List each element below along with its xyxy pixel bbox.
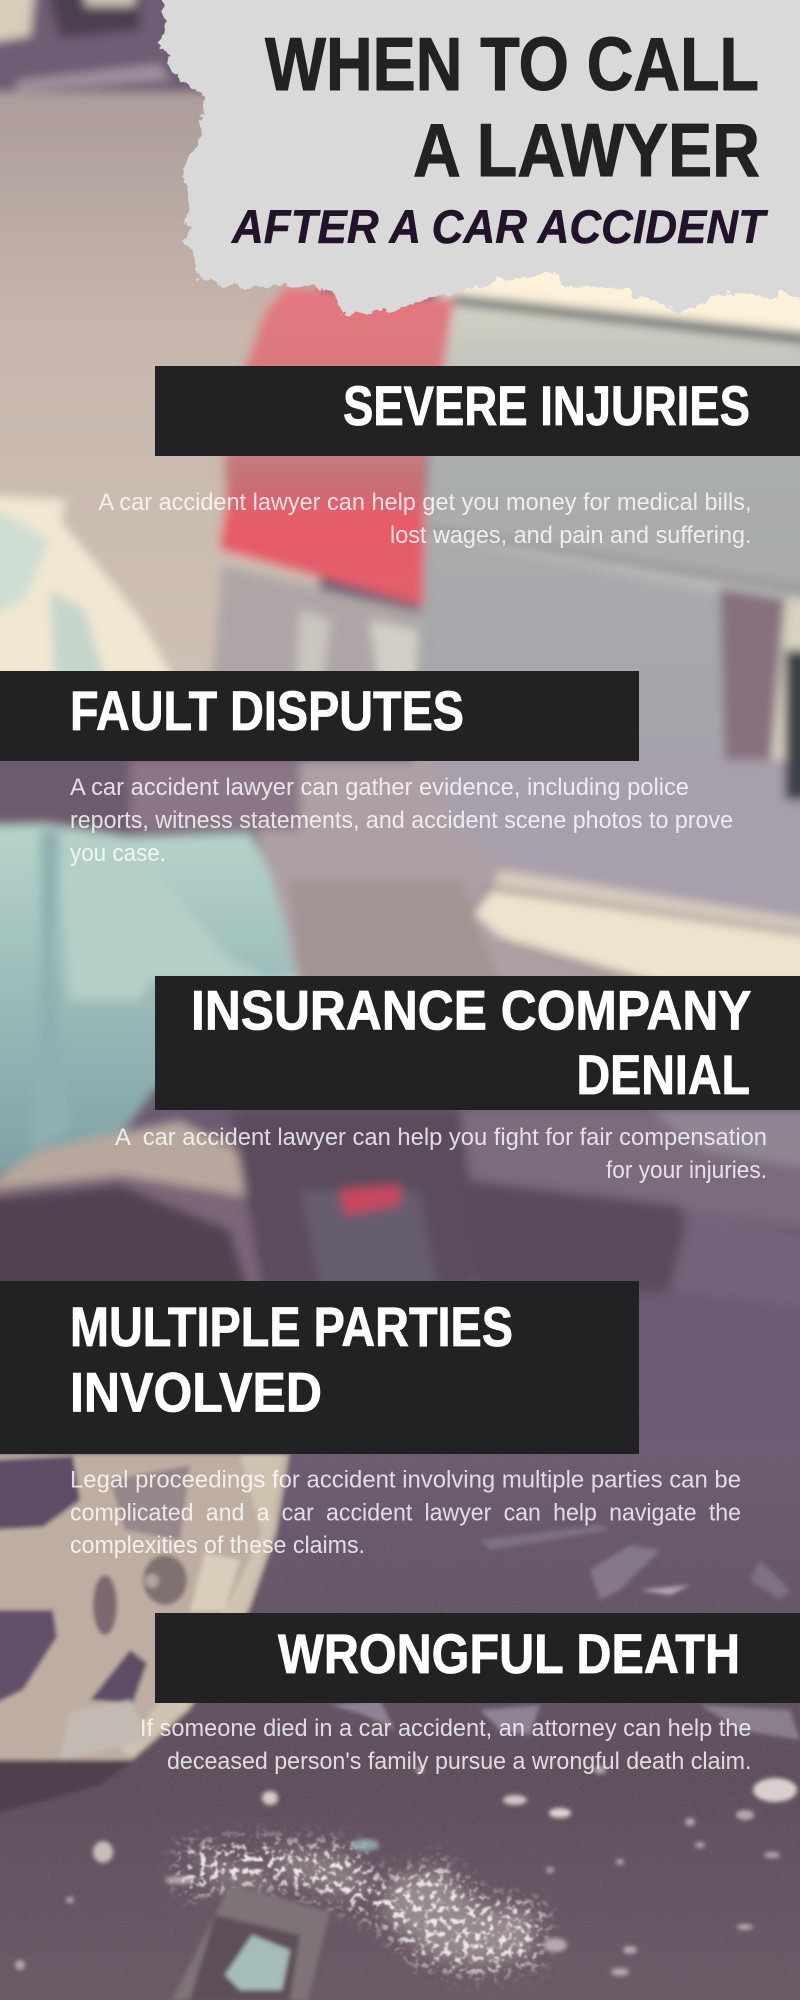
body text: fault disputes: A car accident lawyer can gather evidence, including police xyxy=(70,774,689,801)
body text: severe injuries: A car accident lawyer can help get you money for medical bills, xyxy=(98,489,752,516)
title xyxy=(265,22,760,192)
heading bar: severe injuries xyxy=(155,366,800,456)
body text: multiple parties involved xyxy=(70,1466,741,1559)
body text: fault disputes: you case. xyxy=(70,840,166,867)
section: fault disputes xyxy=(0,671,733,867)
section: insurance company denial xyxy=(115,976,800,1184)
section: severe injuries xyxy=(98,366,800,549)
background: foam base tint xyxy=(190,1850,535,1965)
background: ground xyxy=(0,1440,800,2000)
heading bar: multiple parties involved: MULTIPLE PARTIES xyxy=(70,1295,513,1358)
body text: severe injuries xyxy=(98,489,752,549)
body text: wrongful death xyxy=(140,1715,752,1775)
background: foam speckles xyxy=(180,1840,545,1975)
subtitle: AFTER A CAR ACCIDENT xyxy=(231,200,769,253)
body text: multiple parties involved: Legal proceedings for accident involving multiple parties can be xyxy=(70,1466,741,1494)
torn paper title panel xyxy=(160,0,800,312)
background: cream debris lower left xyxy=(0,495,180,690)
body text: multiple parties involved: complexities of these claims. xyxy=(70,1532,365,1559)
section: multiple parties involved xyxy=(0,1281,741,1559)
background: chrome bumper xyxy=(210,565,423,700)
body text: insurance company denial: for your injuries. xyxy=(606,1157,767,1184)
heading bar: multiple parties involved: INVOLVED xyxy=(70,1360,322,1424)
title: A LAWYER xyxy=(413,108,760,192)
background: car body xyxy=(410,230,800,790)
background: road debris xyxy=(15,1525,800,1976)
background: broken phone xyxy=(172,1885,330,2000)
body text: fault disputes xyxy=(70,774,733,867)
heading bar: wrongful death xyxy=(155,1613,800,1703)
body text: severe injuries: lost wages, and pain and suffering. xyxy=(390,522,752,549)
heading bar: multiple parties involved xyxy=(0,1281,639,1454)
heading bar: fault disputes: FAULT DISPUTES xyxy=(70,679,464,742)
body text: insurance company denial xyxy=(115,1124,767,1184)
section: wrongful death xyxy=(140,1613,800,1775)
heading bar: wrongful death: WRONGFUL DEATH xyxy=(278,1622,740,1685)
body text: wrongful death: If someone died in a car accident, an attorney can help the xyxy=(140,1715,752,1742)
body text: insurance company denial: A car accident lawyer can help you fight for fair compensation xyxy=(115,1124,767,1151)
background: wheel arch and tyre xyxy=(0,1110,800,1390)
background: wheel rim xyxy=(0,1454,290,1815)
background: red tail light xyxy=(219,286,454,607)
background: teal bumper xyxy=(0,824,300,1177)
background: distant car xyxy=(0,0,200,92)
heading bar: insurance company denial xyxy=(155,976,800,1110)
body text: multiple parties involved: complicated and a car accident lawyer can help navigate the xyxy=(70,1500,741,1526)
body text: fault disputes: reports, witness statements, and accident scene photos to prove xyxy=(70,807,733,834)
heading bar: fault disputes xyxy=(0,671,639,761)
background: road surface xyxy=(0,92,320,692)
heading bar: insurance company denial: DENIAL xyxy=(576,1043,750,1106)
background: door and sill xyxy=(0,650,800,985)
body text: wrongful death: deceased person's family pursue a wrongful death claim. xyxy=(167,1748,752,1775)
